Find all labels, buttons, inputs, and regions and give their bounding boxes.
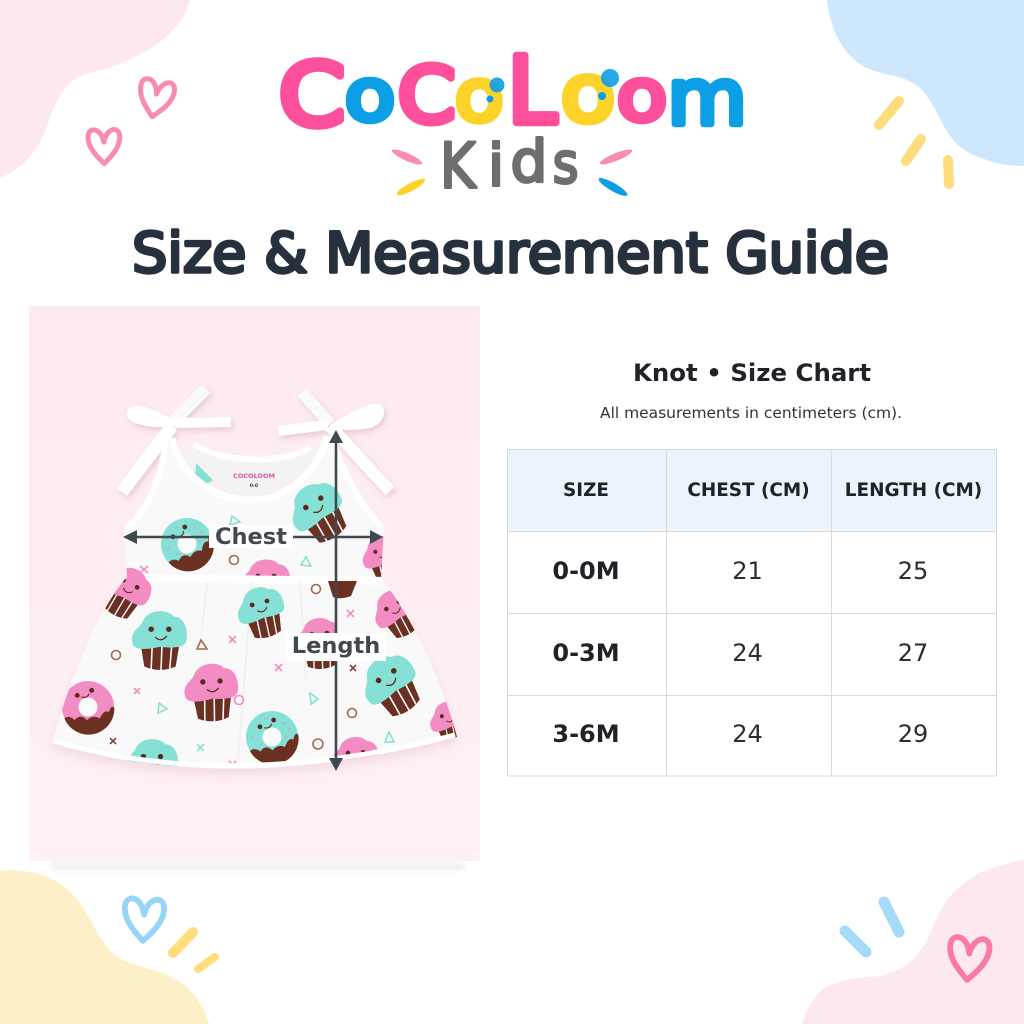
- logo wordmark: L: [508, 38, 556, 145]
- logo sparks: [390, 147, 634, 199]
- dress body: [52, 436, 457, 769]
- logo wordmark: C: [279, 46, 345, 146]
- measurement: chest arrow: [123, 530, 383, 544]
- icon: pink heart left: [88, 129, 120, 164]
- neck back binding: [194, 444, 310, 459]
- dress shadow: [52, 605, 457, 774]
- neck binding: [172, 436, 327, 500]
- row 0-0M: 21: [732, 557, 763, 585]
- icon: pink heart top left: [135, 78, 176, 120]
- logo wordmark: o: [345, 54, 395, 137]
- row 0-3M: 0-3M: [552, 639, 620, 667]
- panel background: [29, 306, 480, 861]
- table header background: [508, 450, 996, 530]
- tie bow right: [278, 392, 390, 491]
- decoration: bottom-left yellow blob: [0, 870, 209, 1024]
- table header row: SIZE: [563, 480, 609, 501]
- logo: CoCoLoom Kids: [279, 38, 747, 202]
- logo wordmark: o: [617, 54, 667, 137]
- skirt lining over waist: [240, 578, 383, 599]
- row 3-6M: 29: [898, 720, 928, 748]
- size table: [508, 450, 996, 776]
- table header row: CHEST (CM): [687, 480, 810, 501]
- icon: yellow sparkle dashes top right: [879, 101, 949, 184]
- row 3-6M: [552, 720, 928, 748]
- icon: yellow dashes bottom left: [173, 932, 215, 969]
- neck back lining: [180, 445, 322, 505]
- armhole binding: [126, 436, 382, 528]
- neck label text: COCOLOOM: [233, 472, 275, 480]
- row 3-6M: 3-6M: [552, 720, 620, 748]
- logo wordmark: [279, 38, 747, 146]
- neck size text: 0-0: [250, 483, 258, 489]
- print skirt: [62, 568, 457, 766]
- logo Kids: d: [510, 128, 547, 196]
- logo wordmark: m: [668, 54, 747, 143]
- decoration: top-right blue blob: [827, 0, 1024, 166]
- brown cupcake base: [328, 581, 357, 598]
- logo wordmark: o: [561, 48, 615, 140]
- measurement: length arrow: [329, 430, 343, 771]
- icon: blue dashes bottom right: [845, 902, 899, 952]
- icon: blue heart bottom left: [123, 898, 165, 942]
- label: chest: Chest: [215, 524, 287, 550]
- logo Kids: [440, 128, 578, 202]
- logo dots: [486, 69, 619, 102]
- hem band: [54, 735, 455, 766]
- row 0-3M: 27: [898, 639, 928, 667]
- row 0-0M: 0-0M: [552, 557, 620, 585]
- pleats: [206, 582, 301, 584]
- row 0-0M: [552, 557, 928, 585]
- print behind neck: [195, 463, 213, 483]
- decoration: bottom-right pink blob: [802, 860, 1024, 1024]
- fabric print: [62, 483, 457, 768]
- decoration: top-left pink blob: [0, 0, 190, 178]
- chart subtitle: All measurements in centimeters (cm).: [600, 404, 902, 422]
- table header row: [563, 480, 982, 501]
- row 3-6M: 24: [732, 720, 763, 748]
- table header row: LENGTH (CM): [845, 480, 982, 501]
- print bodice: [161, 483, 384, 581]
- row 0-3M: 24: [732, 639, 763, 667]
- dress: [52, 385, 457, 775]
- panel: product photo: [29, 306, 480, 870]
- label: length: Length: [292, 633, 380, 659]
- chart heading: Knot • Size Chart: [633, 359, 871, 387]
- logo wordmark: C: [398, 52, 456, 141]
- logo Kids: K: [440, 130, 477, 202]
- tie bow left: [122, 389, 231, 492]
- print small shapes: [110, 516, 394, 768]
- panel shadow: [50, 862, 465, 870]
- row 0-0M: 25: [898, 557, 928, 585]
- table grid: [508, 450, 996, 776]
- logo wordmark: o: [455, 54, 504, 138]
- row 0-3M: [552, 639, 928, 667]
- logo Kids: s: [553, 132, 578, 197]
- logo Kids: i: [488, 132, 504, 200]
- title: Size & Measurement Guide: [132, 221, 889, 285]
- icon: pink heart bottom right: [947, 936, 990, 982]
